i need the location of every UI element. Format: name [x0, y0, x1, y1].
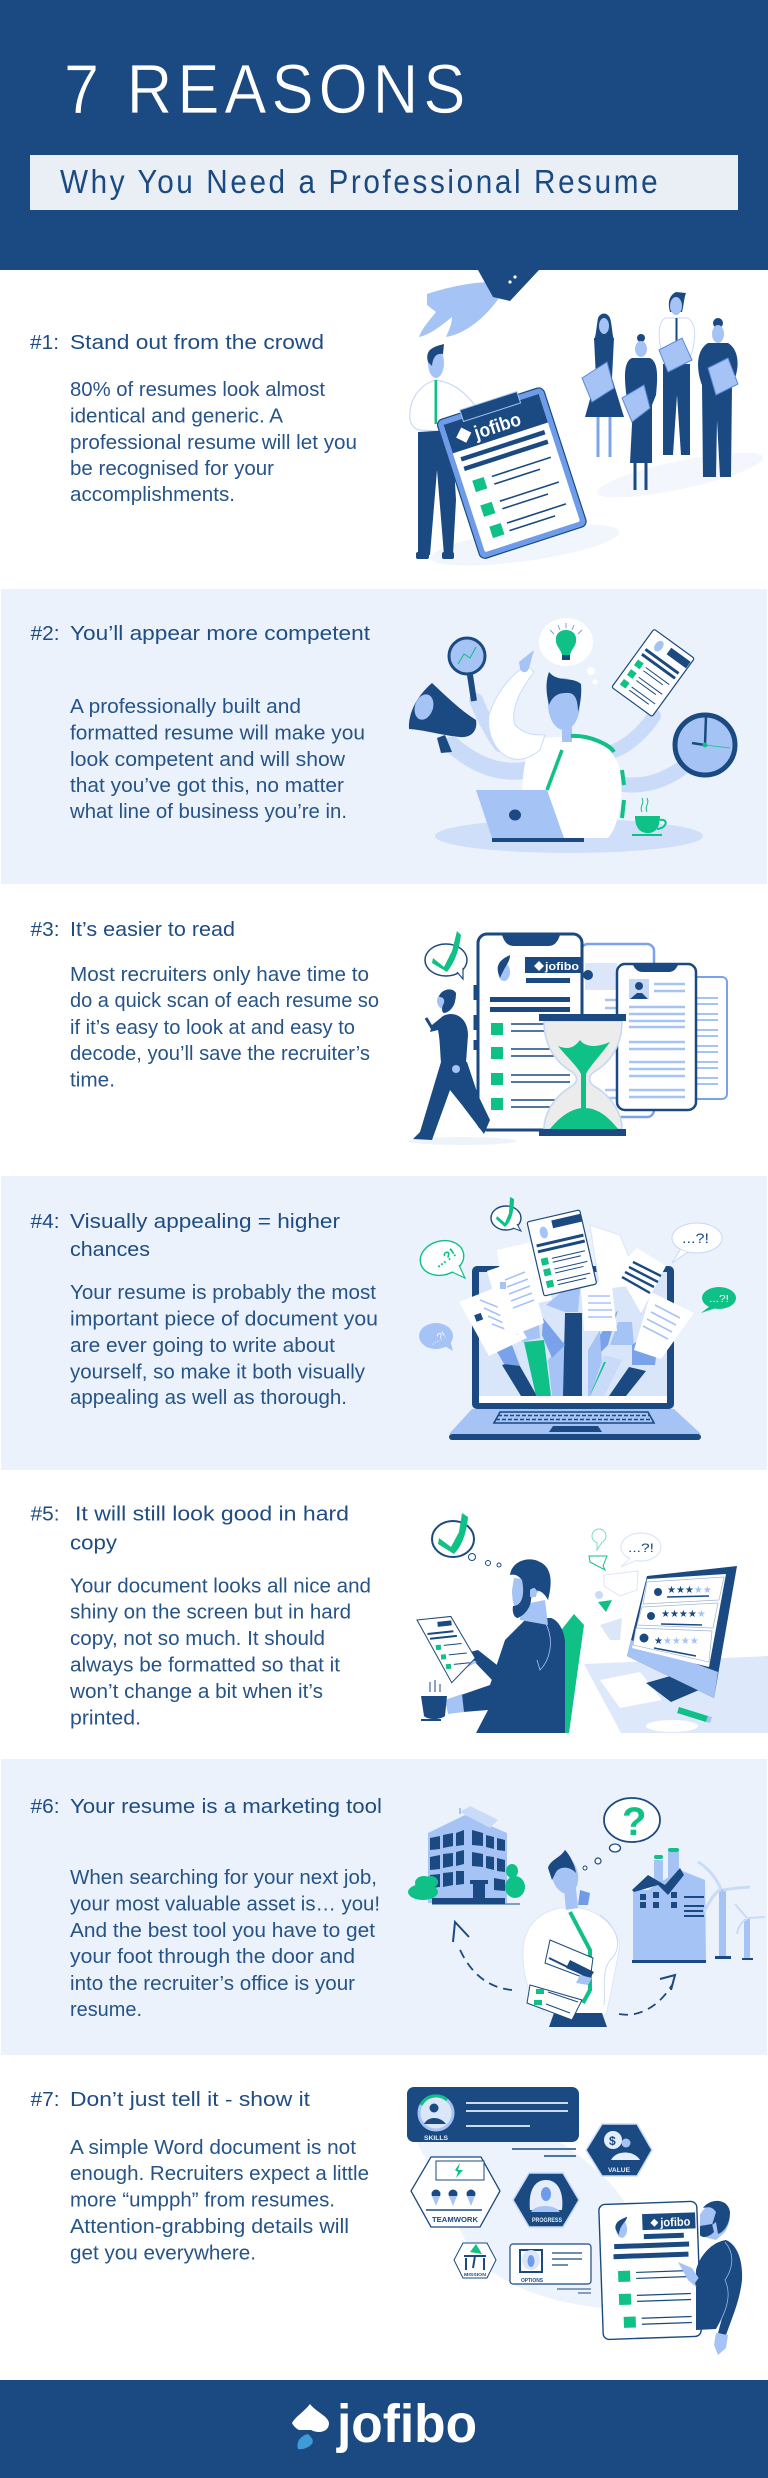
- progress badge: [513, 2173, 579, 2227]
- monitor: ★★★★★: [661, 1609, 706, 1620]
- reason 6 heading: #6:: [30, 1795, 60, 1818]
- reason 3 text: [70, 964, 379, 1092]
- arms: [452, 700, 682, 785]
- monitor: ★★★★★: [667, 1585, 712, 1596]
- icon: filled green bubble: [701, 1287, 736, 1313]
- laptop: [476, 790, 584, 842]
- coffee cup: [421, 1680, 447, 1721]
- reason 1 text: professional resume will let you: [70, 432, 357, 454]
- reason 5 heading: #5:: [30, 1502, 60, 1526]
- value badge: VALUE: [608, 2168, 630, 2174]
- reason 2 heading: You’ll appear more competent: [70, 622, 370, 645]
- icon: filled blue bubble: ...?!: [428, 1330, 448, 1348]
- title: 7 REASONS: [64, 51, 465, 129]
- factory: [632, 1848, 706, 1963]
- icon: question bubble: [583, 1798, 660, 1870]
- wind turbines: [698, 1862, 765, 1960]
- reason 6 text: When searching for your next job,: [70, 1867, 377, 1889]
- reason 2 text: A professionally built and: [70, 696, 301, 718]
- reason 6 text: [70, 1867, 380, 2021]
- reason 2 text: [69, 696, 365, 823]
- reason 4 text: yourself, so make it both visually: [70, 1362, 365, 1384]
- main phone resume: [475, 934, 582, 1130]
- reason 3 heading: #3:: [30, 918, 60, 941]
- resumes behind: [497, 1225, 640, 1310]
- large resume: jofibo: [659, 2214, 691, 2230]
- reason 2 heading: #2:: [30, 622, 60, 645]
- icon: clock: [675, 715, 735, 775]
- reason 1 text: be recognised for your: [70, 458, 274, 480]
- large resume: [599, 2201, 701, 2340]
- reason 5 text: printed.: [70, 1708, 141, 1730]
- logo wordmark: jofibo: [336, 2394, 477, 2454]
- teamwork badge: TEAMWORK: [432, 2217, 478, 2224]
- reason 4 text: important piece of document you: [70, 1308, 378, 1330]
- illustration: man reviewing resume: [417, 1513, 768, 1733]
- value badge: [586, 2124, 652, 2176]
- reason 3 text: Most recruiters only have time to: [70, 964, 369, 986]
- value badge: $: [609, 2134, 616, 2148]
- reason 6 text: resume.: [70, 1999, 142, 2021]
- trees: [408, 1864, 525, 1900]
- main phone resume: jofibo: [544, 961, 579, 973]
- torso: [522, 735, 622, 838]
- icon: check thought bubble: [432, 1513, 501, 1567]
- desk: [584, 1656, 768, 1733]
- logo mark: [292, 2404, 329, 2449]
- resume tablet: [417, 1614, 478, 1686]
- reason 5 heading: It will still look good in hard: [75, 1502, 349, 1526]
- monitor: [627, 1566, 737, 1702]
- reason 2 text: formatted resume will make you: [70, 722, 365, 744]
- header banner: [0, 0, 768, 270]
- reason 5 heading: [30, 1502, 349, 1554]
- footer banner: [0, 2380, 768, 2478]
- presenter: [678, 2201, 742, 2355]
- raised arm: [489, 665, 545, 759]
- reason 3 text: time.: [70, 1070, 115, 1092]
- monitor: ★★★★★: [654, 1636, 699, 1647]
- reason 5 heading: copy: [70, 1532, 118, 1554]
- illustration: multitasking man: [409, 618, 735, 853]
- arrow: to office: [453, 1922, 512, 1990]
- reason 5 text: Your document looks all nice and: [70, 1576, 371, 1598]
- reason 6 heading: Your resume is a marketing tool: [70, 1795, 382, 1818]
- floating comment bubbles: [589, 1529, 661, 1640]
- reason 5 text: [69, 1576, 371, 1730]
- resume in hands: [527, 1940, 594, 2020]
- head: [547, 672, 581, 742]
- reason 4 heading: Visually appealing = higher: [70, 1210, 340, 1233]
- laptop screen: [472, 1266, 674, 1409]
- reason 7 text: enough. Recruiters expect a little: [70, 2163, 369, 2185]
- icon: surprise bubble: ...?!: [682, 1230, 709, 1246]
- icon: filled green bubble: ...?!: [709, 1294, 729, 1305]
- reason 7 text: get you everywhere.: [70, 2242, 256, 2264]
- reason 7 text: [70, 2137, 369, 2264]
- progress badge: PROGRESS: [532, 2218, 562, 2224]
- reason 2 text: that you’ve got this, no matter: [70, 775, 344, 797]
- section 6 panel: [1, 1759, 767, 2055]
- reason 5 text: always be formatted so that it: [70, 1654, 340, 1676]
- reason 2 text: what line of business you’re in.: [69, 801, 347, 823]
- section 4 panel: [1, 1176, 767, 1470]
- reason 3 text: do a quick scan of each resume so: [70, 990, 379, 1012]
- back resume right: [690, 977, 727, 1099]
- reason 4 text: are ever going to write about: [70, 1335, 335, 1357]
- clipboard resume: [435, 384, 588, 560]
- laptop base: [449, 1409, 701, 1440]
- subtitle bar: Why You Need a Professional Resume: [60, 164, 658, 200]
- section 2 panel: [1, 589, 767, 884]
- reason 4 heading: chances: [70, 1238, 150, 1261]
- illustration: career choice: [408, 1798, 765, 2027]
- resume sheets in hands: [459, 1248, 694, 1359]
- section 5 panel: [30, 1502, 768, 1733]
- reason 1 text: identical and generic. A: [70, 406, 284, 428]
- skills card: SKILLS: [424, 2135, 449, 2142]
- icon: question bubble: ?: [622, 1800, 646, 1844]
- man with clipboard: [410, 344, 478, 559]
- floating comment bubbles: ...?!: [628, 1541, 654, 1555]
- icon: filled blue bubble: [419, 1323, 453, 1351]
- reason 3 text: decode, you’ll save the recruiter’s: [70, 1043, 370, 1065]
- reason 4 text: Your resume is probably the most: [70, 1282, 376, 1304]
- icon: pointing hand: [419, 270, 539, 337]
- options card: OPTIONS: [521, 2278, 544, 2284]
- reason 7 text: Attention-grabbing details will: [70, 2216, 349, 2238]
- office building: [428, 1806, 520, 1904]
- reason 6 text: And the best tool you have to get: [70, 1920, 375, 1942]
- reason 6 text: your foot through the door and: [70, 1946, 355, 1968]
- arrow: to factory: [619, 1975, 675, 2015]
- icon: surprise bubble: [672, 1223, 722, 1263]
- reason 3 text: if it’s easy to look at and easy to: [70, 1017, 355, 1039]
- top resume: [527, 1210, 597, 1296]
- icon: magnifier: [449, 638, 485, 701]
- reason 7 heading: #7:: [30, 2088, 60, 2111]
- reason 1 text: accomplishments.: [70, 484, 235, 506]
- reason 7 text: more “umpph” from resumes.: [70, 2190, 335, 2212]
- reason 3 heading: It’s easier to read: [70, 918, 235, 941]
- reason 5 text: shiny on the screen but in hard: [70, 1602, 351, 1624]
- reason 5 text: copy, not so much. It should: [70, 1628, 325, 1650]
- reason 4 text: appealing as well as thorough.: [70, 1387, 347, 1409]
- icon: coffee cup: [632, 798, 666, 836]
- illustration: hand picking a resume: [410, 270, 766, 574]
- small mission badge: MISSION: [464, 2272, 486, 2277]
- hands: [496, 1260, 660, 1366]
- section 1 panel: [30, 270, 766, 574]
- icon: megaphone: [409, 683, 476, 753]
- icon: green marker: [677, 1707, 712, 1723]
- reason 1 text: [70, 379, 357, 506]
- front phone resume: [617, 964, 696, 1110]
- options card: [510, 2244, 591, 2293]
- teamwork badge: [411, 2157, 500, 2227]
- reason 4 text: [70, 1282, 378, 1409]
- walking man: [413, 989, 490, 1140]
- section 7 panel: [30, 2087, 742, 2355]
- icon: green speech bubble: ...?!: [431, 1245, 459, 1271]
- illustration: laptop with resumes: [416, 1197, 736, 1440]
- reason 4 heading: [30, 1210, 340, 1261]
- clipboard resume: jofibo: [471, 409, 524, 444]
- reason 4 heading: #4:: [30, 1210, 60, 1233]
- reason 5 text: won’t change a bit when it’s: [69, 1681, 323, 1703]
- reason 1 heading: #1:: [30, 331, 59, 354]
- back resume middle: [581, 944, 654, 1117]
- reason 7 heading: Don’t just tell it - show it: [70, 2088, 310, 2111]
- reason 1 text: 80% of resumes look almost: [70, 379, 325, 401]
- illustration: phones and hourglass: [408, 931, 727, 1145]
- reason 6 text: into the recruiter’s office is your: [70, 1973, 355, 1995]
- man with beard: [445, 1559, 565, 1733]
- green chair: [541, 1614, 584, 1733]
- skills card: [407, 2087, 579, 2156]
- reason 2 text: look competent and will show: [70, 749, 346, 771]
- reason 1 heading: Stand out from the crowd: [70, 331, 324, 354]
- icon: green speech bubble: [416, 1236, 468, 1280]
- raised sleeves: [502, 1313, 646, 1396]
- icon: resume sheet: [612, 629, 694, 717]
- icon: check speech bubble: [425, 931, 467, 979]
- hourglass: [539, 1014, 626, 1136]
- man holding resume: [523, 1850, 620, 2027]
- icon: idea bubble: [539, 618, 598, 684]
- icon: check bubble: [491, 1197, 521, 1231]
- reason 7 text: A simple Word document is not: [70, 2137, 356, 2159]
- section 3 panel: [30, 918, 727, 1145]
- illustration: skill badges and resume: [407, 2087, 742, 2355]
- subtitle bar: [30, 155, 738, 210]
- group of professionals: [582, 292, 738, 490]
- reason 6 text: your most valuable asset is… you!: [70, 1894, 380, 1916]
- small mission badge: [454, 2243, 496, 2278]
